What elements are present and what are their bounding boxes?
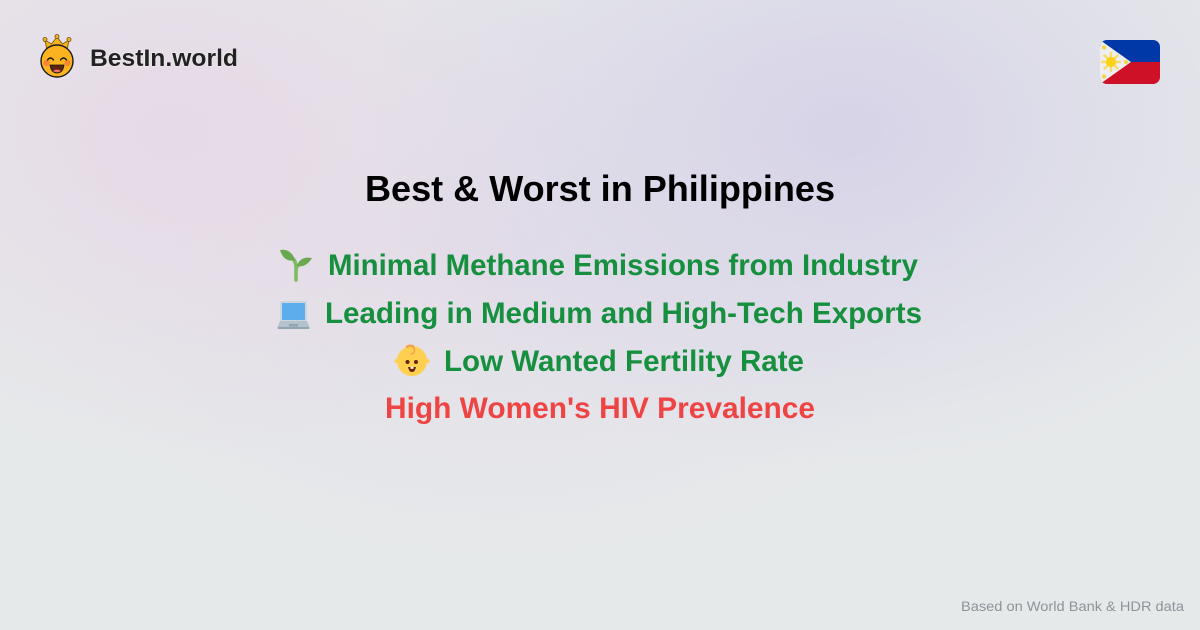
item: HIV: High Women's HIV Prevalence	[385, 392, 815, 425]
title: Best & Worst in Philippines	[365, 168, 835, 209]
icon: Philippines flag	[1100, 40, 1160, 84]
icon: seedling	[280, 250, 312, 280]
logo: crowned smiley and brand name	[41, 34, 238, 77]
item: methane: Minimal Methane Emissions from Industry	[328, 249, 918, 282]
source note: Based on World Bank & HDR data	[961, 598, 1184, 614]
brand name: BestIn.world	[90, 45, 238, 72]
icon: baby face	[394, 345, 430, 376]
icon: laptop	[278, 301, 310, 329]
list of best and worst items	[278, 249, 922, 425]
item: tech exports: Leading in Medium and High-Tech Exports	[325, 297, 922, 330]
item: fertility: Low Wanted Fertility Rate	[444, 345, 804, 378]
icon: crowned smiley	[41, 34, 73, 77]
